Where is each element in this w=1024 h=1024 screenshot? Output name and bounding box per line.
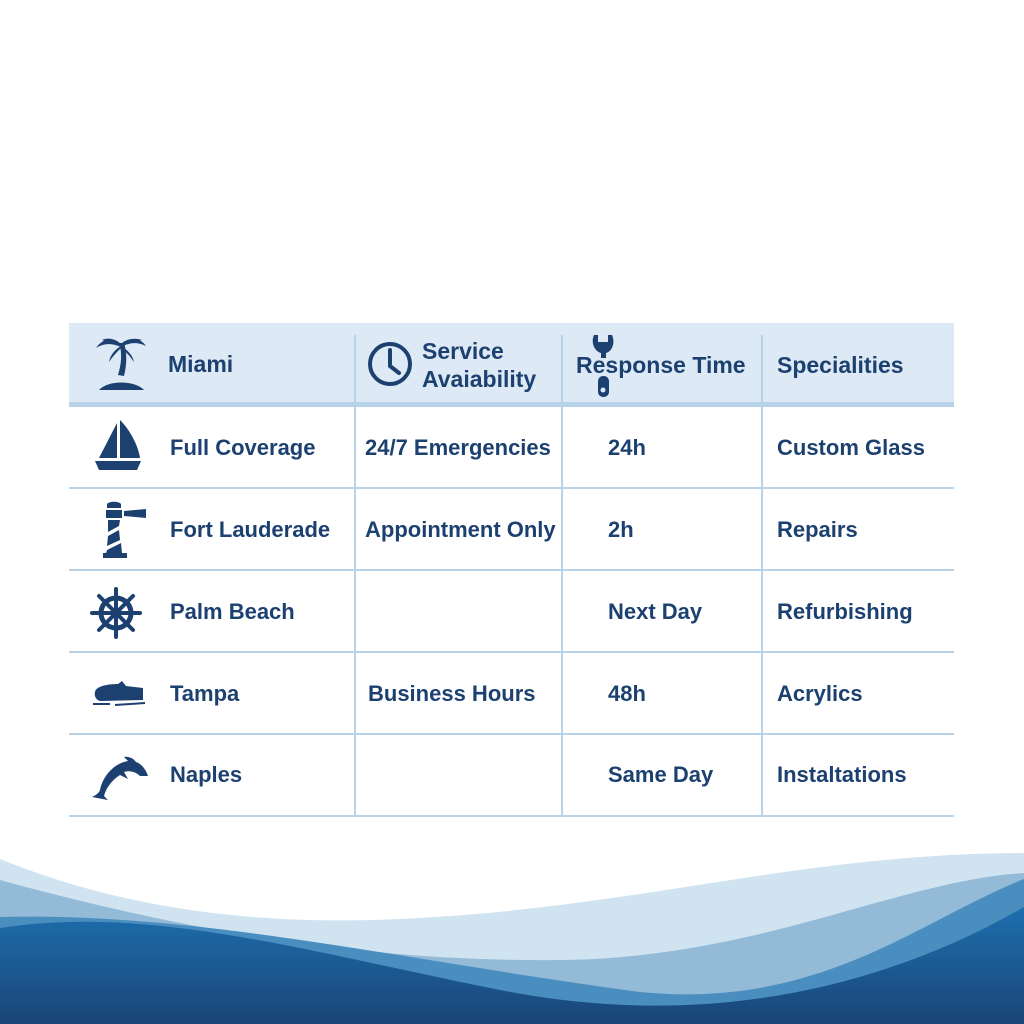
icon: clock (370, 344, 410, 384)
header: Miami: Miami (168, 351, 233, 377)
waves (0, 853, 1024, 1024)
row: Palm Beach: Palm Beach (170, 599, 295, 624)
row: Palm Beach: Refurbishing (777, 599, 913, 624)
header row background (69, 323, 954, 405)
icon: sailboat (95, 420, 141, 470)
row: Tampa (93, 681, 863, 706)
row: Full Coverage: Custom Glass (777, 435, 925, 460)
icon: lighthouse (103, 502, 146, 558)
row: Naples: Same Day (608, 762, 714, 787)
header: Service Availability: Service (422, 338, 504, 364)
row: Tampa: 48h (608, 681, 646, 706)
row: Tampa: Business Hours (368, 681, 536, 706)
icon: dolphin (92, 757, 148, 800)
header: Service Availability (370, 338, 536, 392)
row: Full Coverage: 24/7 Emergencies (365, 435, 551, 460)
row: Fort Lauderdale: Repairs (777, 517, 858, 542)
icon: boat (93, 681, 145, 706)
table (69, 323, 954, 816)
header: Response Time: Response Time (576, 352, 746, 378)
row: Full Coverage (95, 420, 925, 470)
icon: ship wheel (92, 589, 140, 637)
row: Fort Lauderdale: Appointment Only (365, 517, 556, 542)
row: Naples: Naples (170, 762, 242, 787)
header: Specialities: Specialities (777, 352, 904, 378)
row: Palm Beach (92, 589, 913, 637)
header: Service Availability: Avaiability (422, 366, 536, 392)
row: Tampa: Tampa (170, 681, 240, 706)
header: Response Time (576, 335, 746, 397)
row: Naples: Instaltations (777, 762, 907, 787)
row: Full Coverage: 24h (608, 435, 646, 460)
row: Fort Lauderdale: 2h (608, 517, 634, 542)
row: Full Coverage: Full Coverage (170, 435, 315, 460)
icon: wrench (593, 335, 613, 397)
row: Fort Lauderdale: Fort Lauderade (170, 517, 330, 542)
row: Palm Beach: Next Day (608, 599, 703, 624)
header: Miami (96, 339, 233, 390)
icon: palm tree (96, 339, 146, 390)
row: Tampa: Acrylics (777, 681, 863, 706)
row: Naples (92, 757, 907, 800)
row: Fort Lauderdale (103, 502, 858, 558)
